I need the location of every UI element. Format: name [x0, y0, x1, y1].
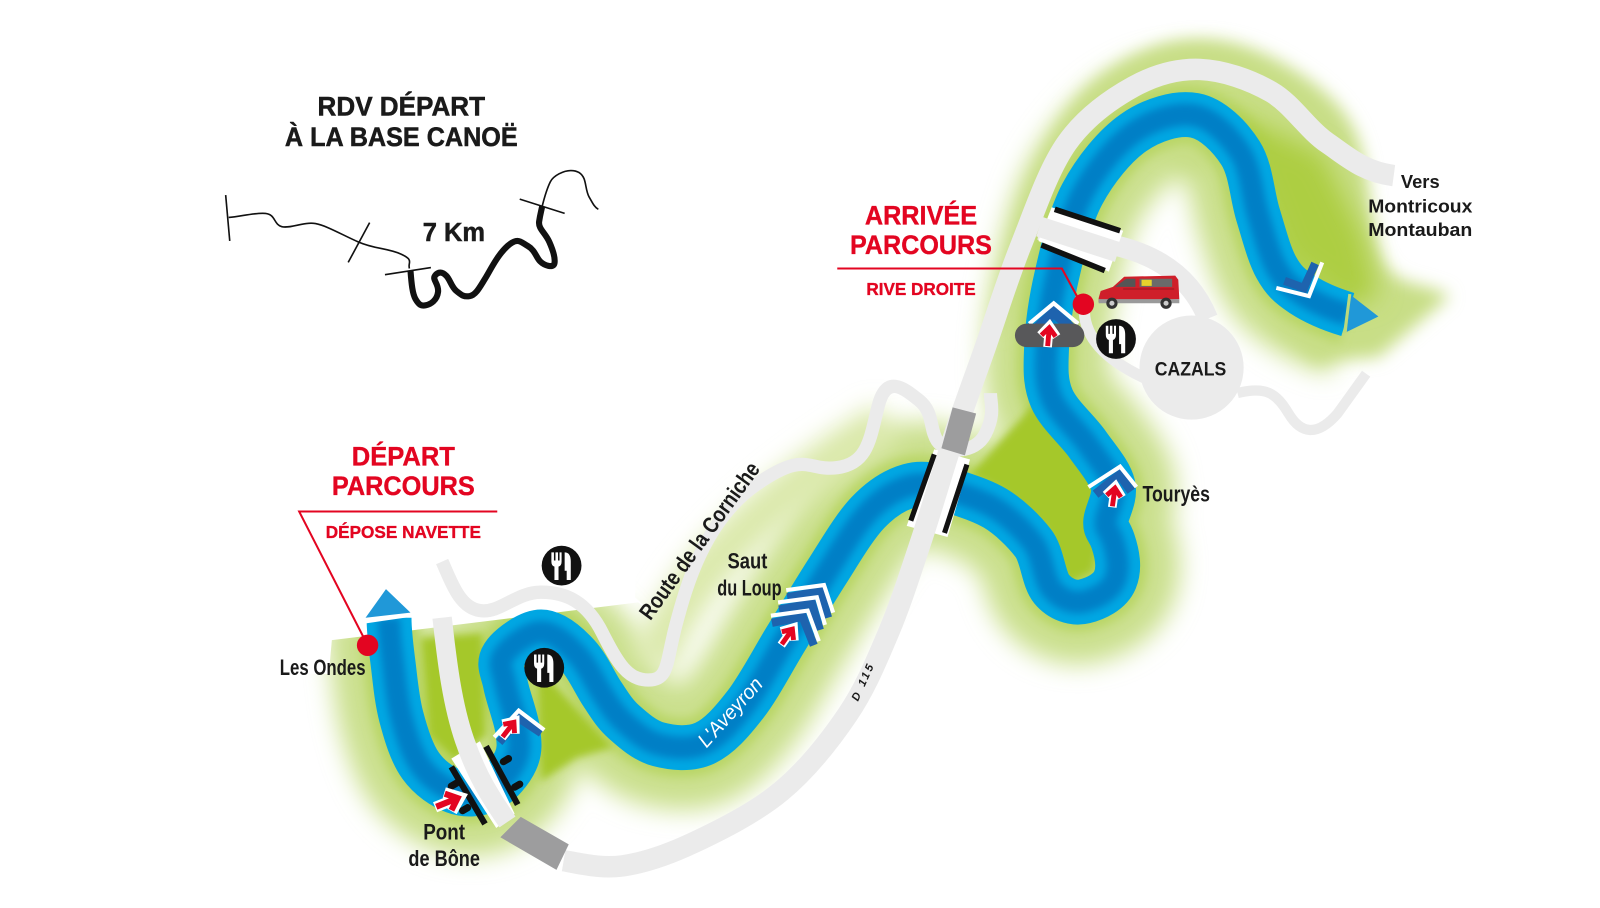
- distance label: 7 Km: [423, 219, 485, 247]
- green valley banks: [286, 39, 1450, 794]
- road: pont de Bône: [442, 618, 507, 822]
- label: Saut du Loup: du Loup: [717, 575, 782, 600]
- label: Pont de Bône: [408, 819, 480, 871]
- label: Vers Montricoux Montauban: Montricoux: [1368, 195, 1473, 216]
- callout: arrivée: [837, 201, 1094, 315]
- bridge parapets: arrival bridge: [1041, 209, 1120, 271]
- chevron: Pont de Bône rapid: [494, 711, 544, 742]
- mini map of the course: [226, 171, 598, 306]
- callout: arrivée: ARRIVÉE: [865, 201, 977, 231]
- icon: restaurant Cazals: [1096, 319, 1136, 359]
- label: Route de la Corniche: Route de la Corniche: [634, 457, 765, 624]
- icon: restaurant river: [524, 648, 564, 688]
- bridge parapets: Pont de Bône: [451, 746, 520, 824]
- label: L'Aveyron: L'Aveyron: [694, 674, 768, 752]
- chevron: Touryès: [1088, 467, 1136, 494]
- finish triangle: [1345, 294, 1378, 333]
- grey segment: D 115 upper: [941, 407, 976, 455]
- grey pill: weir: [1015, 324, 1084, 347]
- circle: Cazals village: [1139, 315, 1244, 420]
- callout: départ: DÉPOSE NAVETTE: [326, 522, 481, 542]
- label: Touryès: Touryès: [1143, 481, 1210, 506]
- chevron: downstream: [1276, 262, 1322, 296]
- grey segment: D 115 lower: [500, 817, 569, 870]
- callout: départ: PARCOURS: [332, 471, 475, 501]
- label: Vers Montricoux Montauban: Montauban: [1368, 219, 1472, 240]
- icon: restaurant north: [542, 546, 582, 586]
- callout: départ: [299, 442, 497, 656]
- icon: shuttle van: [1099, 276, 1179, 309]
- callout: arrivée: PARCOURS: [850, 230, 992, 260]
- river: L'Aveyron: [389, 115, 1348, 794]
- label: D 115: D 115: [850, 662, 877, 703]
- label: Vers Montricoux Montauban: Vers: [1401, 171, 1440, 192]
- label: Pont de Bône: de Bône: [408, 846, 480, 871]
- label: Cazals: CAZALS: [1155, 359, 1226, 381]
- title: RDV DÉPART: [318, 91, 485, 121]
- road: D 115: [564, 69, 1394, 867]
- chevron: arrival: [1029, 303, 1078, 329]
- callout: arrivée: RIVE DROITE: [866, 279, 976, 299]
- label: Saut du Loup: Saut: [728, 549, 768, 574]
- road: pont Cazals band: [1039, 227, 1118, 252]
- bridge parapets: central bridge: [911, 454, 967, 533]
- callout: départ: DÉPART: [352, 442, 455, 472]
- bridges: white decks: [362, 207, 1123, 828]
- title: À LA BASE CANOË: [285, 122, 518, 152]
- label: Pont de Bône: Pont: [423, 819, 466, 844]
- title: [285, 91, 518, 152]
- start triangle: [366, 589, 410, 618]
- label: Saut du Loup: [717, 549, 782, 600]
- label: Vers Montricoux Montauban: [1368, 171, 1473, 240]
- red arrows: [431, 325, 1123, 817]
- label: Les Ondes: Les Ondes: [280, 655, 366, 680]
- chevrons: Saut du Loup: [771, 585, 833, 645]
- road: Cazals access: [1039, 230, 1366, 430]
- road: route de la Corniche: [442, 386, 992, 680]
